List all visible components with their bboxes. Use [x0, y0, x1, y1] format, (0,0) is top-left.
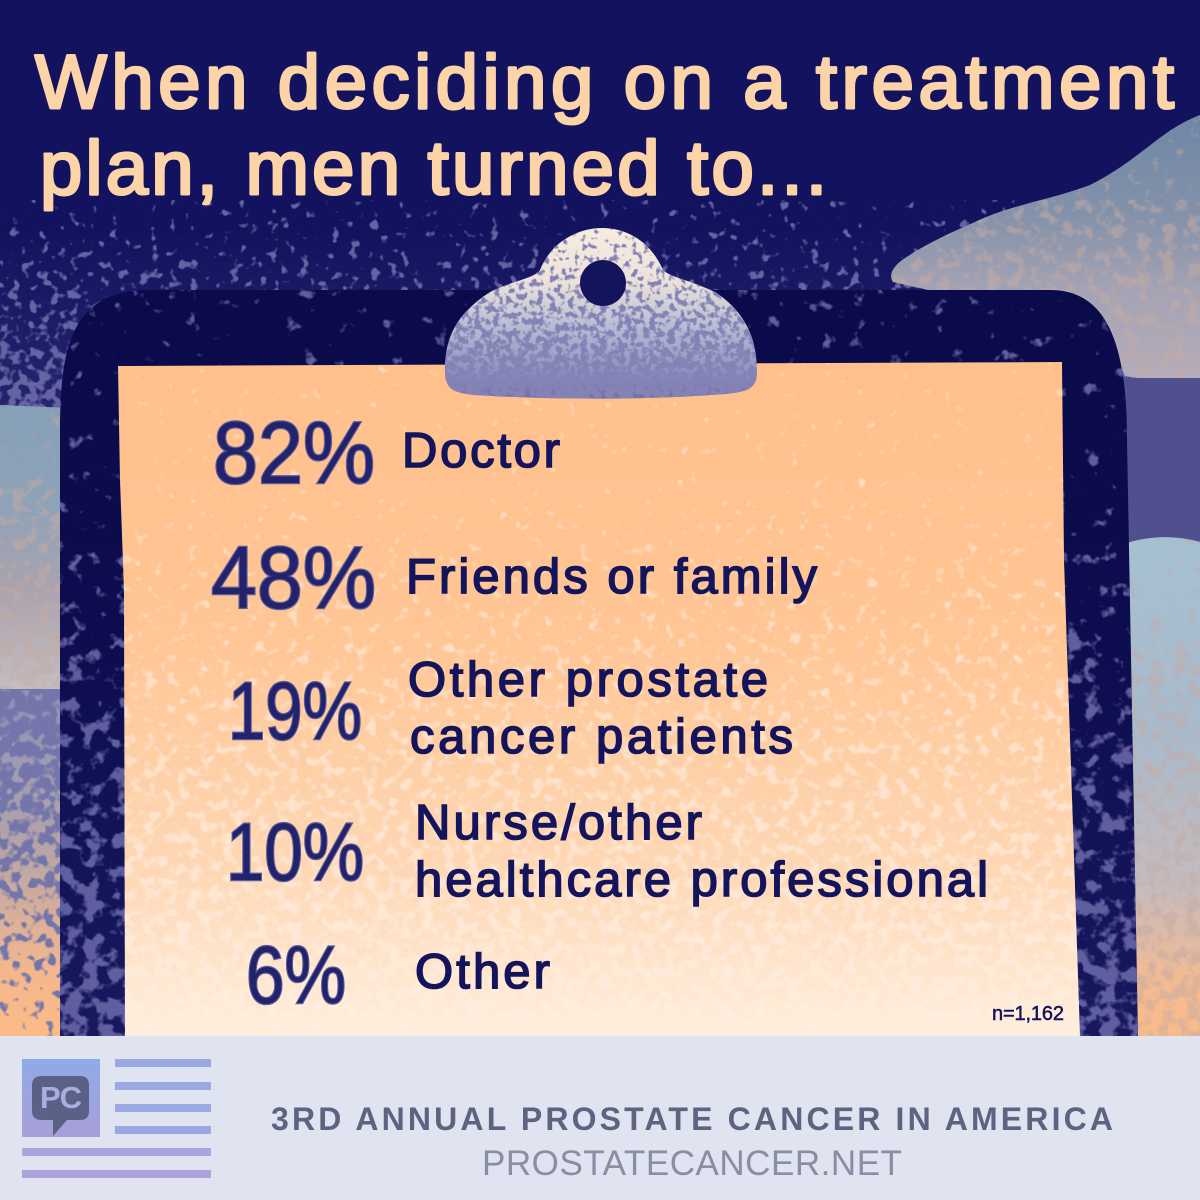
- right purple band: [1120, 378, 1200, 543]
- title: plan, men turned to...: [40, 126, 827, 211]
- list: 6% other: [246, 930, 550, 1021]
- list: 82% doctor: [213, 403, 560, 502]
- list: 48% friends or family: [211, 528, 818, 627]
- list: 6% other: 6%: [246, 930, 346, 1021]
- list: 19% other prostate cancer patients: [228, 653, 793, 764]
- sample size note: n=1,162: [992, 1003, 1064, 1025]
- list: 48% friends or family: 48%: [211, 528, 376, 627]
- right blue patch: [1120, 537, 1200, 1040]
- clipboard paper: [110, 360, 1090, 1040]
- footer heading: 3RD ANNUAL PROSTATE CANCER IN AMERICA: [271, 1101, 1113, 1137]
- list: 19% other prostate cancer patients: cancer patients: [410, 710, 793, 764]
- list: 10% nurse/other healthcare professional: 10%: [226, 807, 364, 898]
- list: 10% nurse/other healthcare professional: Nurse/other: [415, 796, 702, 850]
- right cloud: [891, 115, 1200, 388]
- list: 10% nurse/other healthcare professional: [226, 796, 988, 907]
- left blue patch: [0, 405, 70, 690]
- list: 82% doctor: 82%: [213, 403, 375, 502]
- list: 82% doctor: Doctor: [402, 424, 560, 478]
- clipboard board: [50, 285, 1150, 1040]
- background: [0, 115, 1200, 1036]
- icon: PC logo newspaper: PC: [40, 1080, 82, 1115]
- list: 10% nurse/other healthcare professional: healthcare professional: [415, 853, 988, 907]
- list: 48% friends or family: Friends or family: [406, 550, 818, 604]
- footer band: [0, 1036, 1200, 1200]
- list: 6% other: Other: [415, 945, 550, 999]
- left lower patch: [0, 689, 80, 1040]
- title: [35, 40, 1174, 211]
- list: 19% other prostate cancer patients: Other prostate: [408, 653, 768, 707]
- title: When deciding on a treatment: [35, 40, 1174, 125]
- icon: PC logo newspaper: [22, 1059, 211, 1178]
- footer website: PROSTATECANCER.NET: [482, 1144, 902, 1183]
- clipboard clip: [440, 225, 765, 400]
- list: 19% other prostate cancer patients: 19%: [228, 666, 362, 757]
